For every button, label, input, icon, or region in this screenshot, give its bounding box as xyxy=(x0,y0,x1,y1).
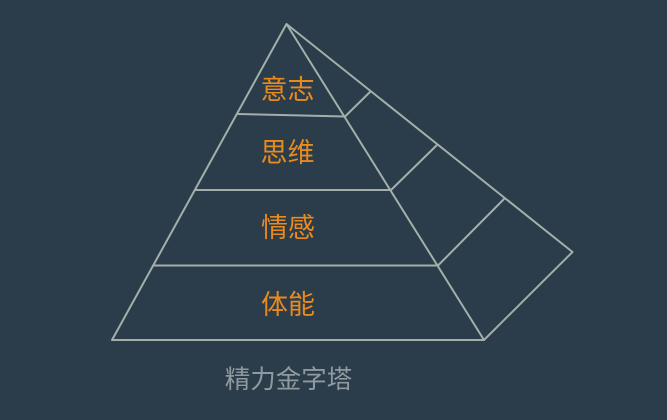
label: thinking level: 思维 xyxy=(260,138,314,168)
label: physical level: 体能 xyxy=(261,290,315,320)
label: willpower level: 意志 xyxy=(260,75,314,105)
pyramid outline xyxy=(112,24,572,340)
caption: 精力金字塔 xyxy=(225,366,352,394)
label: emotion level: 情感 xyxy=(261,213,315,243)
